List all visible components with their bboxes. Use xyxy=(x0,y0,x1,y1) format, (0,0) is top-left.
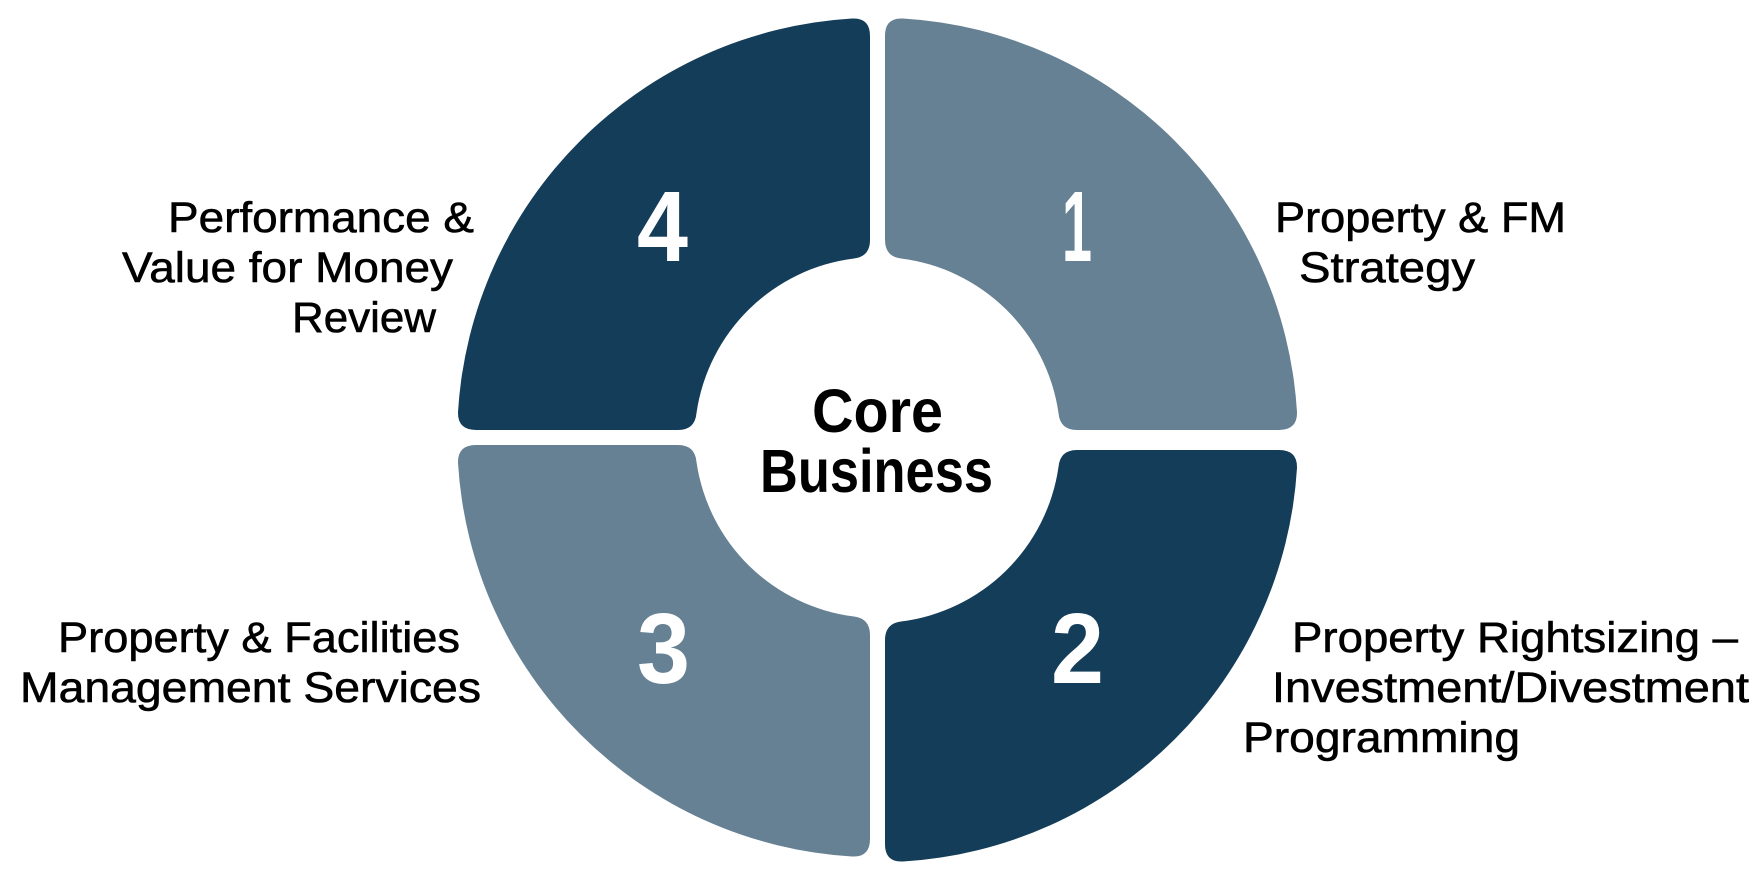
number 1: 1 xyxy=(1062,171,1092,283)
label: property and FM strategy: Property & FM xyxy=(1275,194,1566,242)
heading: core business: Business xyxy=(760,437,993,505)
label: property and facilities management services xyxy=(20,614,481,712)
number 2: 2 xyxy=(1051,593,1104,705)
panel: segment 2 xyxy=(885,450,1297,862)
label: performance and value for money review: Performance & xyxy=(168,194,474,242)
label: property and facilities management services: Management Services xyxy=(20,664,481,712)
panel: segment 3 xyxy=(458,445,870,857)
panel: segment 4 xyxy=(458,18,870,430)
label: performance and value for money review xyxy=(122,194,474,342)
label: property and FM strategy xyxy=(1275,194,1566,292)
label: performance and value for money review: Value for Money xyxy=(122,244,454,292)
label: property rightsizing xyxy=(1243,614,1749,762)
label: property rightsizing: Programming xyxy=(1243,714,1520,762)
number 3: 3 xyxy=(637,593,690,705)
label: property and FM strategy: Strategy xyxy=(1299,244,1476,292)
label: performance and value for money review: Review xyxy=(292,294,437,342)
heading: core business: Core xyxy=(812,377,943,445)
label: property and facilities management services: Property & Facilities xyxy=(58,614,460,662)
label: property rightsizing: Property Rightsizing – xyxy=(1292,614,1738,662)
number 4: 4 xyxy=(637,171,688,283)
heading: core business xyxy=(760,377,993,505)
panel: segment 1 xyxy=(885,18,1297,430)
label: property rightsizing: Investment/Divestment xyxy=(1272,664,1749,712)
